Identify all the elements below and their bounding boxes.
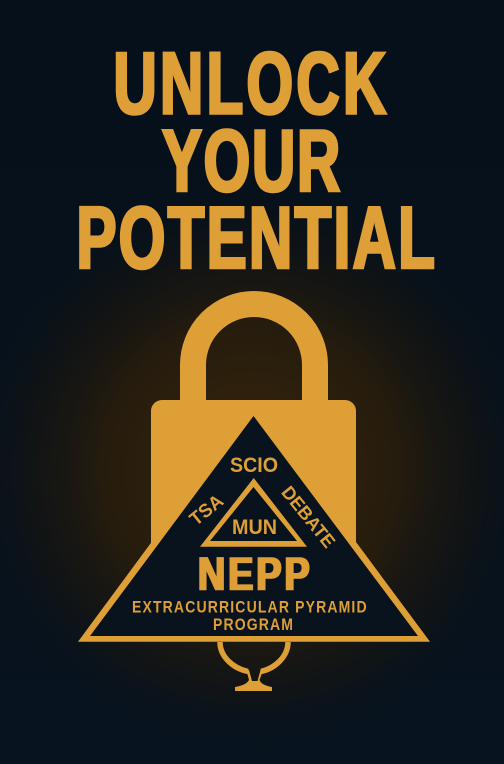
title: Unlock Your Potential: POTENTIAL bbox=[76, 188, 435, 287]
label: TSA: TSA bbox=[186, 491, 228, 530]
title: Unlock Your Potential: UNLOCK bbox=[114, 34, 386, 132]
pyramid dark interior bbox=[90, 416, 418, 636]
pyramid outline bbox=[78, 404, 430, 642]
title: Unlock Your Potential bbox=[76, 34, 435, 287]
padlock shackle bbox=[193, 304, 315, 405]
label: NEPP: NEPP bbox=[198, 548, 310, 601]
stand: bowl and pedestal bbox=[220, 642, 288, 691]
label: DEBATE: DEBATE bbox=[277, 482, 340, 552]
label: SCIO: SCIO bbox=[230, 454, 278, 477]
padlock body bbox=[151, 400, 356, 560]
label: Extracurricular Pyramid: EXTRACURRICULAR PYRAMID bbox=[132, 599, 367, 617]
title: Unlock Your Potential: YOUR bbox=[162, 111, 340, 210]
icon: padlock with pyramid bbox=[78, 304, 430, 691]
inner triangle: MUN bbox=[200, 478, 307, 547]
label: Program: PROGRAM bbox=[213, 616, 293, 634]
label: MUN: MUN bbox=[232, 516, 277, 539]
